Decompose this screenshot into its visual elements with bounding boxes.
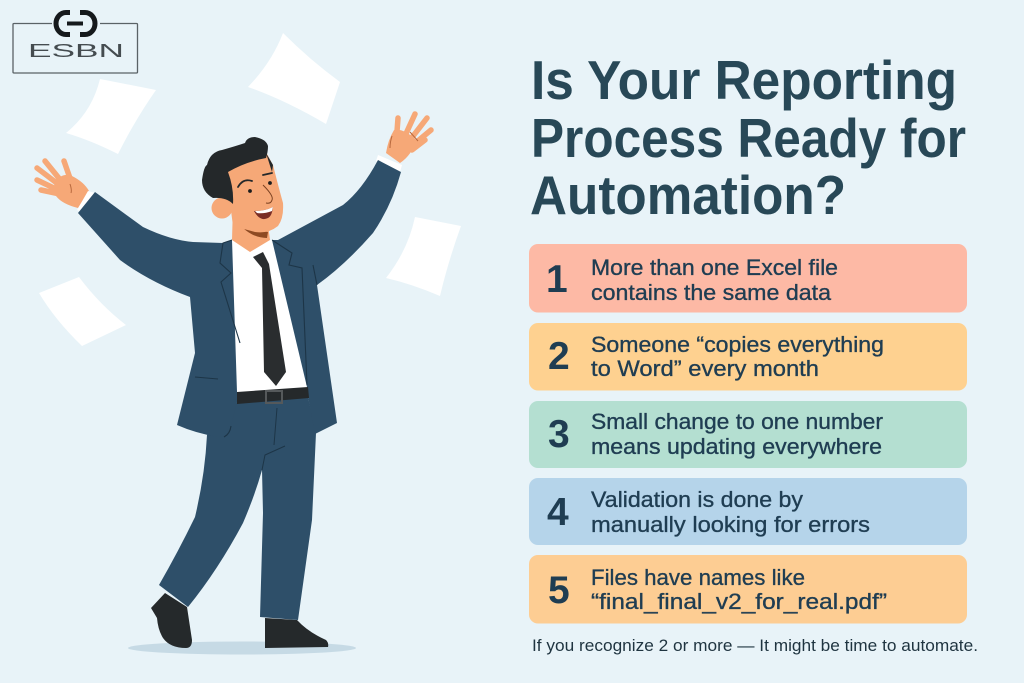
- checklist row 4: manually looking for errors: [591, 512, 870, 537]
- floor shadow: [128, 642, 356, 654]
- face details: [248, 189, 252, 193]
- hair: [202, 137, 268, 204]
- logo: ESBN: [13, 12, 138, 73]
- shirt: [232, 240, 308, 394]
- title: Is Your Reporting: [531, 49, 957, 111]
- checklist row 3: 3: [548, 413, 570, 456]
- left shoe: [151, 593, 192, 648]
- right shoe: [265, 618, 328, 648]
- checklist row 5: “final_final_v2_for_real.pdf”: [591, 589, 887, 614]
- checklist row 1: 1: [546, 258, 568, 301]
- hand left: [37, 161, 89, 208]
- checklist row 2: to Word” every month: [591, 356, 819, 381]
- tie: [253, 252, 286, 386]
- shirt cuffs: [77, 155, 402, 213]
- checklist row 4: 4: [547, 491, 569, 534]
- checklist row 2: 2: [548, 335, 570, 378]
- checklist row 1: [529, 244, 967, 312]
- checklist row 3: [529, 401, 967, 468]
- neck: [232, 205, 270, 252]
- trousers: [159, 397, 316, 620]
- checklist row 4: [529, 478, 967, 545]
- checklist row 4: Validation is done by: [591, 487, 803, 512]
- title: Automation?: [530, 164, 846, 226]
- belt: [237, 387, 309, 404]
- checklist row 3: means updating everywhere: [591, 434, 882, 459]
- flying paper sheets: [39, 33, 461, 346]
- checklist row 2: [529, 323, 967, 390]
- logo: ESBN: ESBN: [28, 41, 124, 61]
- checklist row 1: contains the same data: [591, 280, 832, 305]
- hand right: [386, 114, 431, 163]
- title: Process Ready for: [531, 107, 966, 169]
- checklist row 3: Small change to one number: [591, 409, 883, 434]
- checklist row 1: More than one Excel file: [591, 255, 838, 280]
- illustration: celebrating businessman: [37, 114, 431, 648]
- head: [212, 198, 232, 218]
- jacket right side: [272, 160, 401, 434]
- checklist row 5: Files have names like: [591, 565, 805, 590]
- footer note: If you recognize 2 or more — It might be time to automate.: [532, 636, 978, 655]
- checklist row 5: [529, 555, 967, 624]
- title: [530, 49, 966, 226]
- checklist row 2: Someone “copies everything: [591, 332, 884, 357]
- jacket left side: [78, 192, 237, 437]
- checklist row 5: 5: [548, 569, 570, 612]
